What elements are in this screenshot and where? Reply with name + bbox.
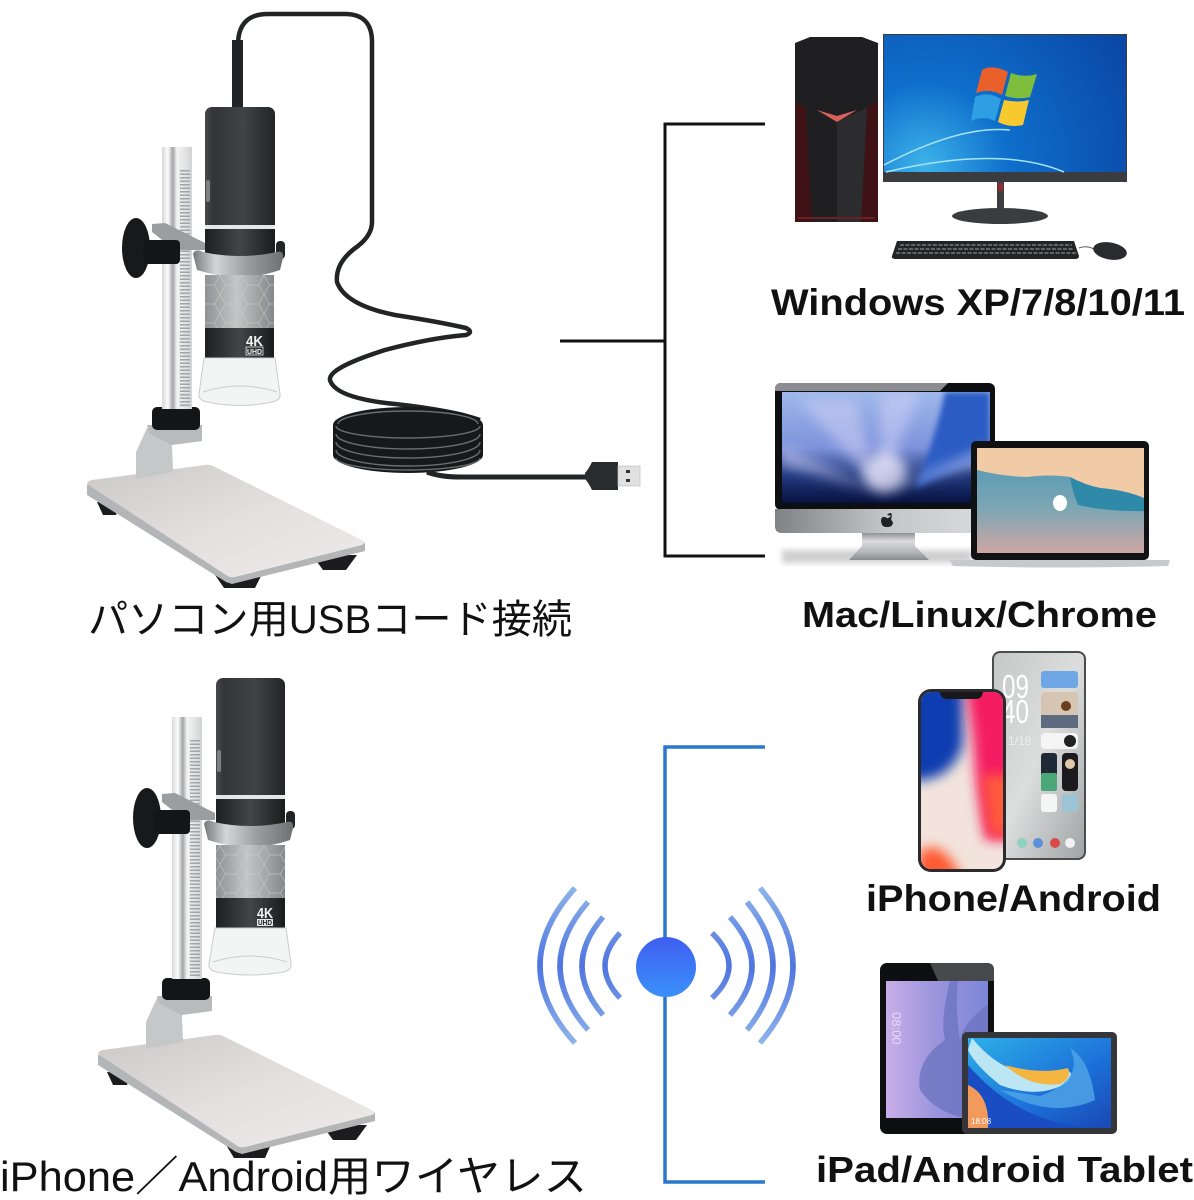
apple logo: [1053, 495, 1067, 511]
clamp arm: [152, 223, 205, 250]
monitor: [883, 34, 1127, 224]
Android phone: 1/18: [1008, 734, 1032, 748]
desk shadow: [782, 550, 972, 563]
pole collar: [152, 407, 200, 430]
label: iPad: iPad/Android Tablet: [816, 1149, 1193, 1190]
blue connection bracket: [665, 747, 765, 1182]
UHD label: UHD: [247, 349, 262, 356]
cable line: [238, 14, 480, 420]
landscape tablet: 18:08: [971, 1117, 992, 1126]
iPhone: [918, 689, 1006, 872]
pole collar: [162, 978, 210, 1000]
camera collar: [193, 250, 283, 277]
Windows logo: [971, 67, 1037, 126]
apple logo: [881, 513, 893, 527]
wired microscope on stand: [87, 40, 365, 588]
stand base: [87, 465, 365, 584]
stand base: [98, 1035, 375, 1154]
camera lower band: [216, 898, 285, 928]
lens cap: [209, 928, 291, 975]
keyboard: [892, 241, 1079, 259]
portrait tablet: 08:00: [889, 1012, 904, 1045]
wireless microscope on stand: [98, 678, 375, 1158]
honeycomb section: [205, 275, 274, 328]
label: USB connection: パソコン用USBコード接続: [88, 598, 572, 642]
iMac: [775, 383, 995, 560]
Mac and laptop group: [775, 383, 1170, 568]
lens cap: [199, 358, 280, 406]
honeycomb section: [216, 845, 285, 898]
MacBook: [950, 441, 1170, 568]
label: iPhone/Android: iPhone/Android: [866, 878, 1161, 919]
label: wireless: iPhone／Android用ワイヤレス: [0, 1153, 587, 1200]
camera body: [205, 107, 275, 257]
4K label: 4K: [257, 905, 273, 922]
Android phone: 40: [1002, 693, 1029, 730]
USB plug: [585, 462, 640, 490]
wifi centre dot: [636, 937, 696, 997]
black connection bracket: [560, 124, 765, 556]
stand feet: [107, 1072, 367, 1158]
mouse: [1079, 240, 1128, 262]
UHD label: [246, 347, 263, 356]
cable to plug: [427, 472, 590, 477]
landscape tablet: [962, 1032, 1117, 1134]
USB cable: [238, 14, 640, 490]
stand feet: [97, 502, 357, 588]
4K label: 4K: [246, 333, 263, 350]
clamp knob: [133, 788, 190, 848]
stand pole: [162, 147, 192, 409]
portrait tablet: [880, 963, 994, 1134]
Android phone: [992, 651, 1086, 860]
cable coil: [333, 407, 483, 473]
camera collar: [204, 820, 293, 847]
camera body: [216, 678, 285, 826]
tablets group: [880, 963, 1117, 1134]
UHD label: UHD: [258, 920, 272, 927]
clamp knob: [122, 218, 180, 278]
phones group: [918, 651, 1086, 872]
Android phone: 09: [1002, 668, 1029, 705]
clamp arm: [162, 793, 215, 820]
PC tower: [795, 37, 878, 222]
stand pole: [172, 717, 202, 979]
wifi signal waves: [540, 888, 793, 1043]
label: Windows: Windows XP/7/8/10/11: [771, 282, 1185, 323]
desktop PC group: [795, 34, 1128, 262]
rear clamp screw: [276, 241, 285, 259]
camera cable boot: [232, 40, 243, 108]
stand bracket: [146, 996, 212, 1049]
stand bracket: [136, 425, 202, 479]
rear clamp screw: [286, 811, 295, 829]
camera lower band: [205, 328, 274, 358]
label: Mac: Mac/Linux/Chrome: [802, 594, 1157, 635]
